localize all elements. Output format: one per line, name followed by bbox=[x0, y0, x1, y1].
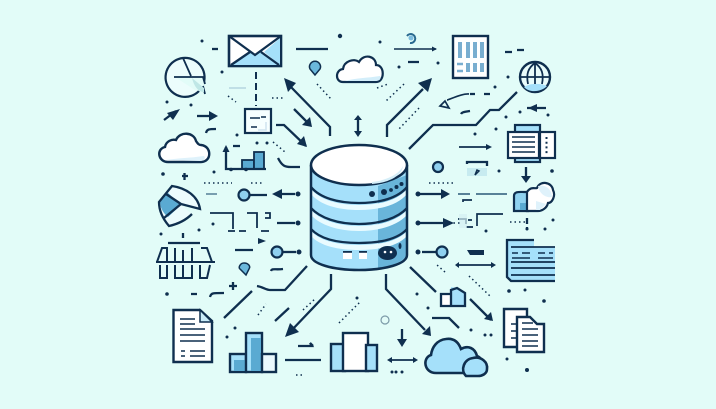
icon: small house chart bbox=[441, 287, 465, 306]
icon: table panel right bbox=[507, 240, 555, 281]
scattered dots bbox=[160, 34, 554, 374]
icon: globe bbox=[520, 62, 550, 92]
icon: bottom building chart bbox=[331, 333, 377, 371]
icon: document table bbox=[453, 36, 488, 78]
icon: list document left-bottom bbox=[174, 310, 212, 362]
icon: map pin top bbox=[309, 61, 321, 75]
arrows right of database bbox=[416, 144, 531, 268]
icon: stacked documents right top bbox=[508, 125, 555, 162]
arrows left of database bbox=[206, 189, 302, 275]
icon: top cloud bbox=[337, 57, 383, 82]
icon: left bridge columns bbox=[156, 233, 215, 278]
dotted connector lines bbox=[204, 84, 526, 375]
icon: ring marker top bbox=[407, 34, 415, 43]
icon: envelope bbox=[229, 36, 281, 66]
icon: small bar chart bbox=[222, 145, 266, 171]
icon: bottom cloud bbox=[425, 339, 487, 376]
icon: bottom bar chart bbox=[230, 333, 276, 372]
icon: small text card bbox=[245, 109, 271, 133]
arrows radiating around database bbox=[224, 78, 517, 337]
icon: left cloud bbox=[159, 134, 209, 162]
icon: central database cylinder bbox=[311, 145, 407, 270]
icon: top-left pie chart bbox=[166, 58, 205, 97]
icon: right cloud folder bbox=[514, 183, 554, 211]
icon: left pie chart bbox=[159, 186, 200, 226]
icon: stacked paper bottom right bbox=[504, 309, 544, 352]
arrows upper-left and misc bbox=[164, 46, 546, 363]
